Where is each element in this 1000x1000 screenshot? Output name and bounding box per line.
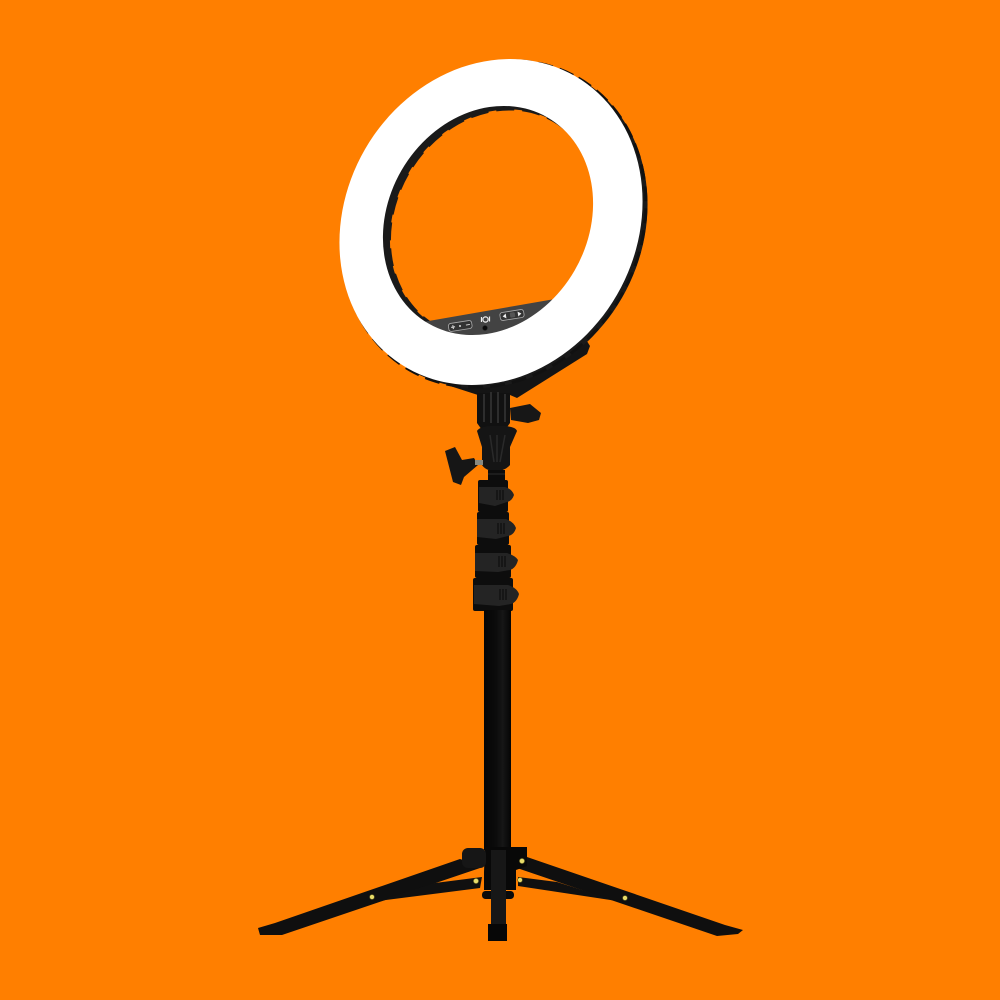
tripod base xyxy=(258,847,743,941)
power jack xyxy=(483,326,487,330)
right leg xyxy=(517,857,743,936)
control panel xyxy=(420,300,570,350)
clamp 3 xyxy=(475,545,518,578)
center leg xyxy=(491,850,506,924)
hub knob xyxy=(462,848,486,868)
left strut xyxy=(378,877,482,901)
right strut xyxy=(518,877,617,901)
colour temperature buttons xyxy=(500,309,524,321)
ring bracket arm xyxy=(447,338,590,398)
rivets xyxy=(370,858,627,900)
inner opening of the ring xyxy=(349,71,639,375)
T-handle side knob xyxy=(445,447,483,485)
right locking knob xyxy=(510,404,541,423)
clamp 4 xyxy=(473,578,519,611)
cross piece xyxy=(482,891,514,899)
ring light housing xyxy=(283,5,706,444)
hub xyxy=(484,847,527,890)
main pole xyxy=(484,610,511,850)
neck collar xyxy=(477,426,517,480)
clamp 1 xyxy=(478,480,514,512)
white LED ring xyxy=(339,59,643,385)
center foot xyxy=(488,924,507,941)
brightness buttons xyxy=(448,320,472,332)
tilt head with ribs xyxy=(477,392,510,430)
clamp 2 xyxy=(477,512,516,545)
telescopic clamps xyxy=(473,480,519,611)
eco icon xyxy=(482,316,490,322)
background xyxy=(0,0,1000,500)
left leg xyxy=(258,859,483,935)
illustration: ring light on tripod stand xyxy=(258,59,743,941)
